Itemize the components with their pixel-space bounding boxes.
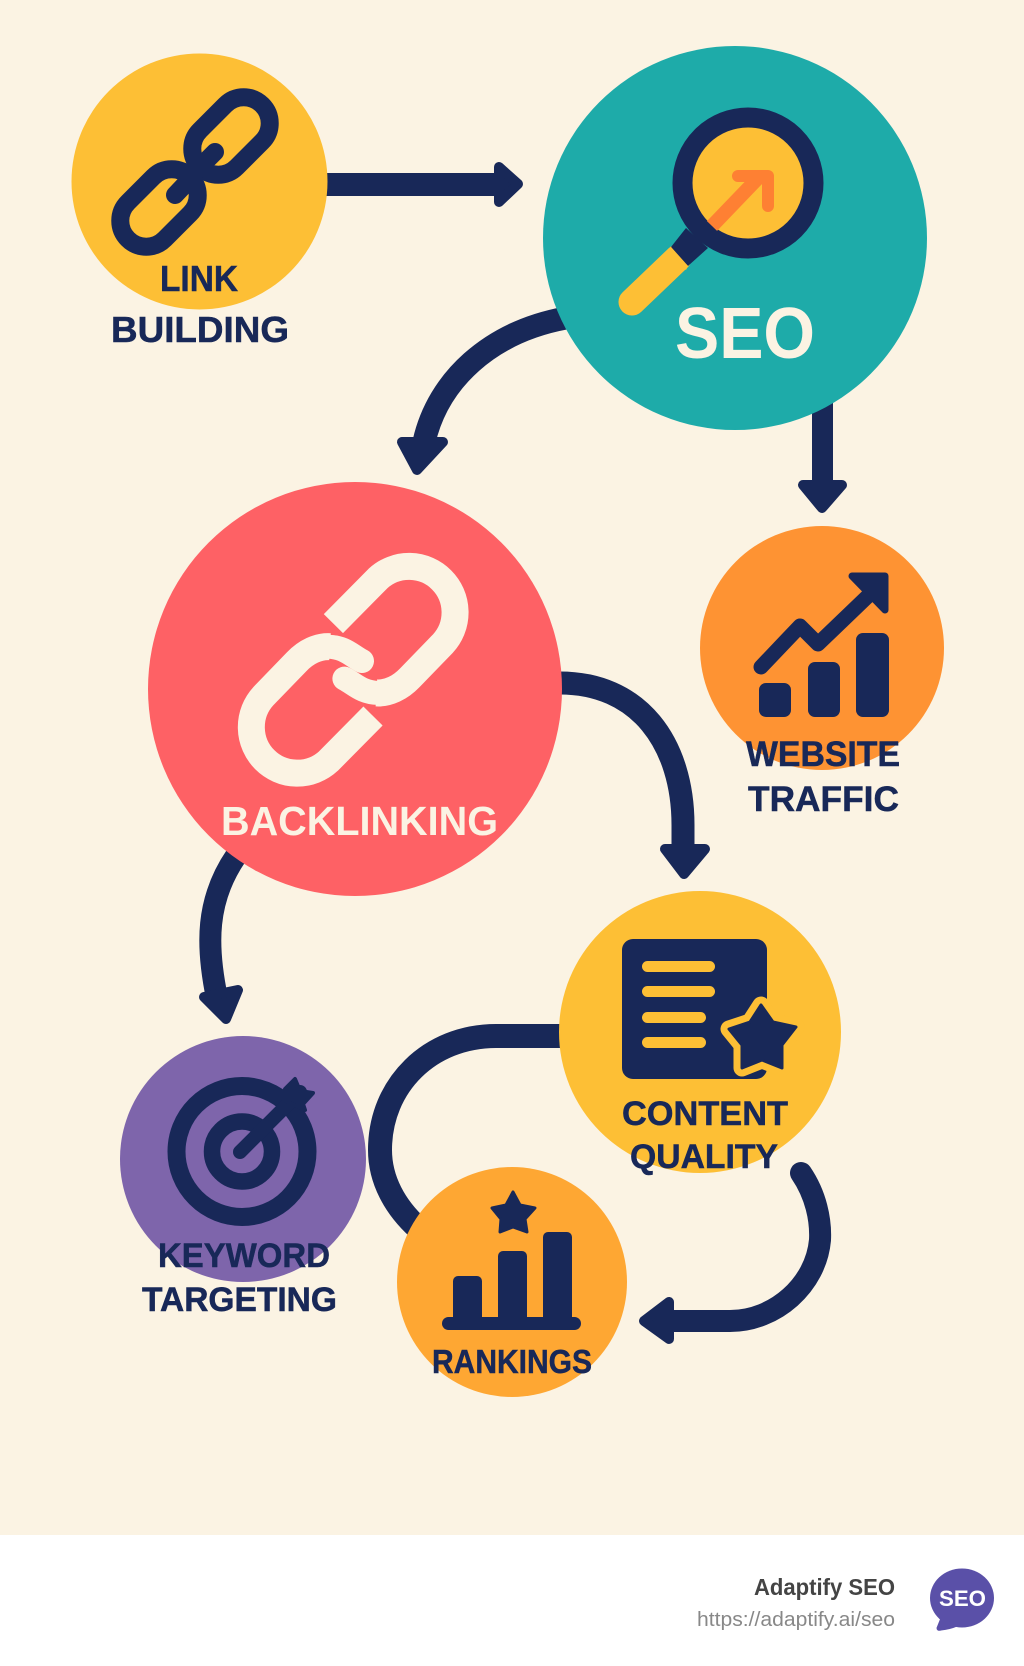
icon: white chain link [251, 566, 455, 773]
footer band [0, 1535, 1024, 1666]
footer url: https://adaptify.ai/seo [697, 1609, 895, 1631]
arrow: content quality to rankings, short curve [644, 1173, 820, 1339]
label: content quality: CONTENT [622, 1095, 788, 1133]
icon: bars with star [442, 1192, 581, 1330]
node: keyword targeting [120, 1036, 366, 1319]
label: rankings: RANKINGS [432, 1343, 592, 1380]
arrow: SEO to website traffic [803, 395, 842, 508]
icon: SEO speech bubble badge [930, 1568, 994, 1630]
icon: magnifying glass [632, 118, 814, 302]
circle: link building [72, 54, 328, 310]
footer brand name: Adaptify SEO [754, 1574, 895, 1600]
icon: growth chart [759, 576, 889, 717]
circle: website traffic [700, 526, 944, 770]
node: SEO [543, 46, 927, 430]
circle: SEO [543, 46, 927, 430]
arrow: SEO to backlinking [402, 318, 566, 470]
icon: SEO speech bubble badge: SEO [939, 1586, 986, 1611]
label: content quality: QUALITY [630, 1138, 778, 1176]
label: keyword targeting: KEYWORD [158, 1237, 330, 1275]
label: SEO: SEO [675, 294, 815, 374]
arrow: backlinking to content quality [556, 683, 705, 874]
arrow: link building to SEO [320, 167, 518, 202]
label: link building [111, 258, 289, 350]
icon: target with dart [176, 1079, 313, 1217]
label: content quality [622, 1095, 788, 1176]
node: link building [72, 54, 328, 350]
icon: document with star [622, 939, 796, 1079]
label: keyword targeting: TARGETING [142, 1281, 337, 1319]
circle: keyword targeting [120, 1036, 366, 1282]
label: website traffic: WEBSITE [746, 735, 900, 774]
icon: chain link [110, 87, 280, 257]
node: rankings [397, 1167, 627, 1397]
label: link building: BUILDING [111, 309, 289, 350]
circle: content quality [559, 891, 841, 1173]
label: backlinking: BACKLINKING [221, 798, 498, 844]
arrow: content quality to rankings, long curve [380, 1036, 564, 1228]
label: website traffic: TRAFFIC [748, 780, 899, 819]
label: website traffic [746, 735, 900, 819]
node: backlinking [148, 482, 562, 896]
node: website traffic [700, 526, 944, 819]
circle: backlinking [148, 482, 562, 896]
node: content quality [559, 891, 841, 1176]
label: keyword targeting [142, 1237, 337, 1319]
circle: rankings [397, 1167, 627, 1397]
label: link building: LINK [160, 258, 238, 299]
arrow: backlinking to keyword targeting [204, 856, 238, 1019]
